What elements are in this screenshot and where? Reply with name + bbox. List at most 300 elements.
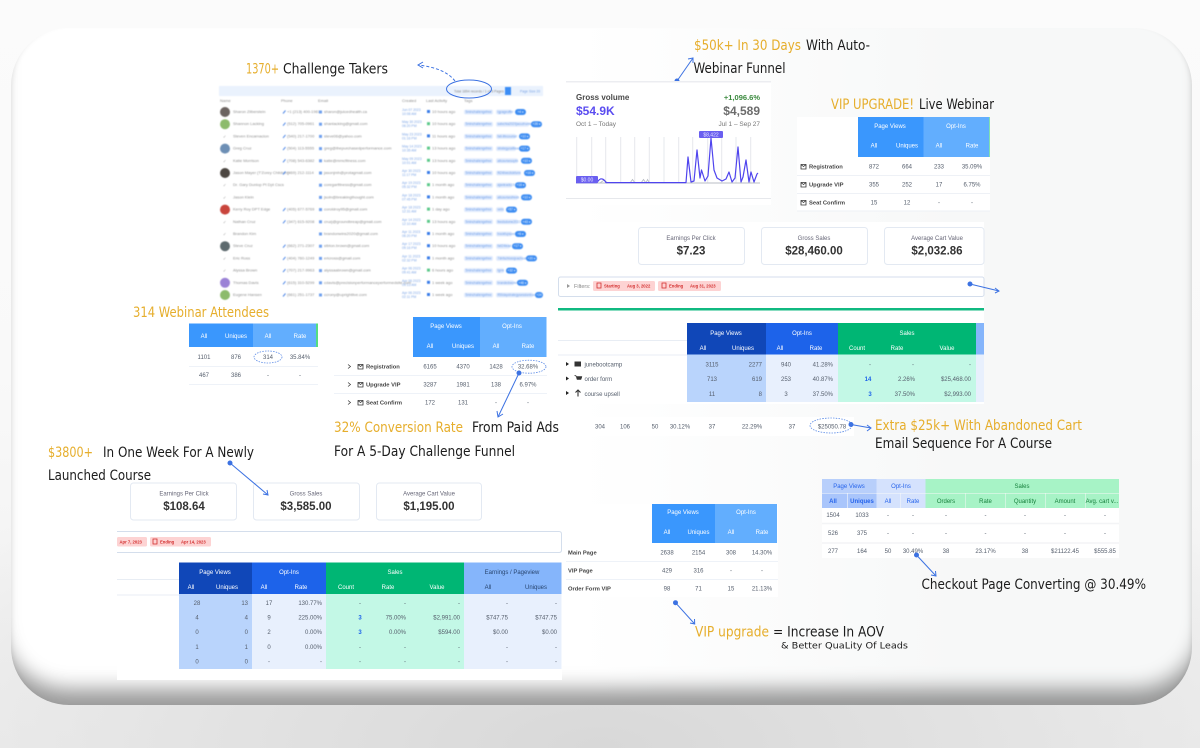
panel: challenge takers contact table: 09:16 PM: [402, 246, 417, 250]
table: new course sales: -: [268, 660, 270, 666]
table: new course sales: $594.00: [438, 630, 461, 636]
panel: challenge takers contact table: 1 month ago: [432, 255, 455, 260]
panel: vip upgrade pages table: Uniques: [687, 530, 710, 536]
panel: vip upgrade pages table: 308: [726, 551, 737, 557]
panel: webinar attendees table: All: [201, 334, 207, 340]
heading: vip upgrade increase in aov: [695, 624, 909, 652]
panel: webinar attendees table: 1101: [198, 355, 211, 361]
panel: abandoned cart funnel table: 11: [709, 392, 716, 398]
panel: abandoned cart funnel table: 619: [752, 377, 763, 383]
arrow: to vip upgrade heading: [674, 601, 695, 624]
abandoned cart result row: 304: [595, 424, 606, 430]
panel: challenge takers contact table: 11 hours ago: [432, 133, 456, 138]
table: new course sales: $0.00: [542, 630, 558, 636]
heading: 50k in 30 days: [694, 38, 870, 77]
table: new course sales: 0: [267, 645, 271, 651]
panel: webinar attendees table: 314: [263, 355, 274, 361]
table: new course sales: -: [458, 645, 460, 651]
panel: challenge takers contact table: +24: [536, 293, 542, 297]
panel: abandoned cart funnel table: [558, 323, 984, 402]
panel: checkout sales table: 50: [885, 549, 892, 555]
panel: challenge takers contact table: Greg Cruz: [233, 146, 251, 151]
panel: challenge takers contact table: Sharon Zilberstein: [233, 109, 265, 114]
panel: vip upgrade live webinar table: 17: [936, 183, 943, 189]
panel: challenge takers contact table: (540) 217-1700: [287, 133, 315, 138]
table: new course sales: 0.00%: [389, 630, 407, 636]
table: new course sales: -: [404, 660, 406, 666]
panel: gross volume chart: $8,422: [703, 132, 719, 138]
panel: challenge takers contact table: coregarfitness@gmail.com: [324, 182, 372, 187]
panel: checkout sales table: Avg. cart v...: [1086, 499, 1119, 505]
panel: webinar attendees table: 35.84%: [290, 355, 311, 361]
panel: challenge takers contact table: greg@thepurchasedperformance.com: [324, 146, 392, 151]
panel: challenge takers contact table: 5minchallengefree: [466, 232, 492, 236]
table: new course sales: Value: [430, 585, 445, 591]
panel: challenge takers contact table: Tags: [464, 98, 472, 103]
panel: paid ads challenge funnel table: 131: [458, 401, 469, 407]
panel: vip upgrade live webinar table: 355: [869, 183, 880, 189]
panel: vip upgrade pages table: 71: [695, 587, 702, 593]
table: new course sales: Page Views: [199, 570, 231, 576]
table: new course sales: All: [188, 585, 194, 591]
panel: vip upgrade pages table: -: [730, 569, 732, 575]
table: new course sales: All: [261, 585, 267, 591]
panel: paid ads challenge funnel table: -: [527, 401, 529, 407]
panel: challenge takers contact table: Phone: [281, 98, 293, 103]
panel: gross volume chart: $4,589: [723, 104, 760, 118]
table: new course sales: -: [555, 601, 557, 607]
panel: challenge takers contact table: ericross@gmail.com: [324, 255, 361, 260]
panel: vip upgrade live webinar table: 664: [902, 165, 913, 171]
panel: challenge takers contact table: shanlacking@gmail.com: [324, 121, 368, 126]
heading: 50k in 30 days: $50k+ In 30 Days: [694, 38, 801, 54]
panel: challenge takers contact table: 13 hours ago: [432, 158, 456, 163]
panel: abandoned cart funnel table: 40.87%: [813, 377, 834, 383]
table: new course sales: 75.00%: [386, 616, 407, 622]
panel: gross volume chart: Jul 1 – Sep 27: [718, 121, 760, 128]
table: new course sales: 3: [358, 630, 362, 636]
panel: checkout sales table: Quantity: [1014, 499, 1036, 505]
panel: checkout sales table: Rate: [979, 499, 992, 505]
panel: challenge takers contact table: +26 ▾: [533, 122, 541, 126]
panel: challenge takers contact table: 07:45 PM: [402, 197, 417, 201]
panel: checkout sales table: -: [1024, 513, 1026, 519]
table: new course sales: 0: [195, 630, 199, 636]
panel: checkout sales table: 1033: [855, 513, 869, 519]
panel: challenge takers contact table: [219, 84, 543, 302]
panel: vip upgrade live webinar table: Uniques: [896, 144, 918, 150]
panel: challenge takers contact table: ✓: [223, 158, 226, 163]
panel: abandoned cart funnel table: 253: [781, 377, 792, 383]
heading: 1370+ challenge takers: 1370+: [246, 62, 279, 78]
arrow: to gross sales card: [228, 461, 268, 495]
panel: challenge takers contact table: (512) 705-0961: [287, 121, 315, 126]
filter bar: aug dates: Starting: [604, 284, 620, 288]
panel: vip upgrade live webinar table: Seat Confirm: [809, 201, 845, 207]
panel: challenge takers contact table: cdavis@precisionperformanceperformedsite.com: [324, 280, 412, 285]
panel: checkout sales table: Rate: [907, 499, 920, 505]
heading: vip upgrade live webinar: [831, 97, 994, 113]
panel: paid ads challenge funnel table: Opt-Ins: [502, 324, 522, 330]
heading: vip upgrade increase in aov: & Better QuaLity Of Leads: [781, 642, 909, 652]
heading: checkout page converting: Checkout Page Converting @ 30.49%: [922, 577, 1146, 593]
panel: challenge takers contact table: +1 (213) 400-1967: [287, 109, 321, 114]
panel: challenge takers contact table: 10:08 AM: [402, 112, 417, 116]
panel: paid ads challenge funnel table: Uniques: [452, 344, 474, 350]
table: new course sales: Sales: [387, 570, 403, 576]
heading: 50k in 30 days: Webinar Funnel: [694, 61, 786, 77]
table: new course sales: 13: [241, 601, 249, 607]
panel: challenge takers contact table: Apr 06 2023: [402, 279, 421, 283]
panel: gross volume chart: [566, 81, 771, 205]
table: new course sales: 0: [245, 630, 249, 636]
panel: checkout sales table: 526: [828, 531, 839, 537]
panel: vip upgrade pages table: 2154: [692, 551, 706, 557]
panel: challenge takers contact table: (615) 310-5299: [287, 280, 315, 285]
table: new course sales: Uniques: [525, 585, 547, 591]
stat cards: earnings, gross sales, cart value: [638, 228, 984, 264]
panel: abandoned cart funnel table: 41.28%: [813, 362, 834, 368]
panel: challenge takers contact table: Shannon Lacking: [233, 121, 264, 126]
panel: challenge takers contact table: Apr 18 2023: [402, 193, 421, 197]
stat cards: new course: $1,195.00: [403, 501, 455, 513]
abandoned cart result row: [581, 417, 854, 436]
annotation: ellipse around 314: [254, 351, 282, 363]
panel: vip upgrade live webinar table: Rate: [966, 144, 979, 150]
table: new course sales: -: [506, 601, 508, 607]
panel: challenge takers contact table: fall24lead: [498, 244, 511, 248]
arrow: dashed to challenge takers heading: [418, 62, 455, 81]
panel: vip upgrade live webinar table: [797, 117, 990, 211]
panel: challenge takers contact table: jasonjmh@protagmail.com: [323, 170, 372, 175]
table: new course sales: -: [359, 660, 361, 666]
panel: challenge takers contact table: Apr 17 2023: [402, 242, 421, 246]
table: new course sales: [117, 562, 562, 669]
panel: paid ads challenge funnel table: 172: [425, 401, 436, 407]
panel: challenge takers contact table: 5minchallengefree: [466, 171, 492, 175]
panel: vip upgrade pages table: 429: [662, 569, 673, 575]
panel: webinar attendees table: Uniques: [225, 334, 247, 340]
arrow: filter bar off right: [968, 282, 999, 293]
panel: checkout sales table: -: [945, 531, 947, 537]
panel: checkout sales table: -: [887, 531, 889, 537]
panel: challenge takers contact table: Nathan Cruz: [233, 219, 255, 224]
panel: webinar attendees table: [189, 324, 318, 384]
panel: challenge takers contact table: allcoursesfreeb: [498, 195, 519, 199]
table: new course sales: 4: [195, 616, 199, 622]
panel: abandoned cart funnel table: 2.26%: [898, 377, 916, 383]
panel: paid ads challenge funnel table: 32.68%: [518, 365, 539, 371]
panel: challenge takers contact table: 5minchallengefree: [466, 159, 492, 163]
panel: challenge takers contact table: 05:32 PM: [402, 185, 417, 189]
panel: challenge takers contact table: +57 ▾: [508, 208, 516, 212]
table: new course sales: -: [359, 645, 361, 651]
table: new course sales: -: [555, 645, 557, 651]
panel: gross volume chart: Oct 1 – Today: [576, 121, 617, 128]
panel: vip upgrade pages table: Rate: [756, 530, 769, 536]
panel: challenge takers contact table: 06:20 PM: [402, 234, 417, 238]
panel: new course funnel backdrop: [117, 526, 562, 680]
panel: challenge takers contact table: 10:35 AM: [402, 149, 417, 153]
panel: abandoned cart funnel table: 3: [784, 392, 788, 398]
panel: abandoned cart funnel table: course upsell: [584, 392, 620, 398]
panel: vip upgrade pages table: Main Page: [568, 551, 597, 557]
stat cards: new course: $108.64: [163, 501, 205, 513]
panel: challenge takers contact table: tgrm: [498, 269, 504, 273]
stat cards: new course: Gross Sales: [290, 492, 322, 498]
panel: challenge takers contact table: Apr 19 2023: [402, 181, 421, 185]
panel: abandoned cart funnel table: -: [969, 362, 971, 368]
panel: challenge takers contact table: (662) 271-2307: [287, 243, 315, 248]
panel: checkout sales table: 23.17%: [975, 549, 996, 555]
table: new course sales: -: [506, 660, 508, 666]
panel: challenge takers contact table: 01:16 PM: [402, 136, 417, 140]
panel: challenge takers contact table: Eugene Hansen: [233, 292, 262, 297]
table: new course sales: $0.00: [493, 630, 509, 636]
panel: checkout sales table: -: [1104, 531, 1106, 537]
panel: checkout sales table: 1504: [826, 513, 840, 519]
panel: challenge takers contact table: ccrony@uprightlive.com: [324, 292, 367, 297]
panel: challenge takers contact table: ✓: [223, 195, 226, 200]
panel: challenge takers contact table: Kerry Roy DPT Edge: [233, 207, 271, 212]
panel: challenge takers contact table: May 09 2023: [402, 157, 422, 161]
stat cards: earnings, gross sales, cart value: Average Cart Value: [911, 236, 964, 242]
heading: extra 25k abandoned cart: [875, 418, 1082, 452]
panel: challenge takers contact table: allcoursesoptn: [498, 159, 518, 163]
panel: challenge takers contact table: sharon@juicedhealth.ca: [324, 109, 368, 114]
panel: challenge takers contact table: 10 hours ago: [432, 243, 456, 248]
panel: challenge takers contact table: 02:32 PM: [402, 258, 417, 262]
panel: vip upgrade live webinar table: All: [871, 144, 877, 150]
heading: 32% conversion rate: From Paid Ads: [472, 420, 559, 436]
panel: challenge takers contact table: ajaxleads19: [498, 183, 515, 187]
panel: vip upgrade pages table: 21.13%: [752, 587, 773, 593]
panel: challenge takers contact table: 1 month ago: [432, 231, 455, 236]
panel: challenge takers contact table: Eric Ross: [233, 255, 250, 260]
panel: challenge takers contact table: +16 ▾: [526, 171, 534, 175]
table: new course sales: $747.75: [535, 616, 558, 622]
table: new course sales: Rate: [295, 585, 308, 591]
panel: abandoned cart funnel table: 3: [868, 392, 872, 398]
panel: abandoned cart funnel table: Sales: [899, 331, 915, 337]
arrow: to checkout heading: [914, 553, 936, 576]
panel: gross volume chart: Gross volume: [576, 93, 630, 102]
panel: challenge takers contact table: jsoln@breakingthought.com: [323, 194, 374, 199]
panel: challenge takers contact table: +10 ▾: [523, 195, 531, 199]
panel: challenge takers contact table: ✓: [223, 268, 226, 273]
panel: vip upgrade pages table: Order Form VIP: [568, 587, 611, 593]
panel: challenge takers contact table: 5minchallengefree: [466, 147, 492, 151]
panel: vip upgrade pages table: 98: [664, 587, 671, 593]
filter bar: april dates: Ending: [160, 539, 175, 544]
panel: challenge takers contact table: ✓: [223, 134, 226, 139]
panel: challenge takers contact table: Created: [402, 98, 416, 103]
panel: vip upgrade live webinar table: Page Views: [874, 124, 906, 130]
panel: checkout sales table: -: [945, 513, 947, 519]
panel: challenge takers contact table: ✓: [223, 183, 226, 188]
panel: challenge takers contact table: (504) 113-5555: [287, 146, 315, 151]
panel: challenge takers contact table: +4 ▾: [517, 110, 524, 114]
panel: challenge takers contact table: Total 1894 records / 1 of 5 Pages: [454, 90, 504, 94]
panel: challenge takers contact table: 13 hours ago: [432, 146, 456, 151]
panel: challenge takers contact table: (405) 677-5769: [287, 207, 315, 212]
panel: paid ads challenge funnel table: All: [427, 344, 433, 350]
panel: abandoned cart funnel table: Opt-Ins: [792, 331, 812, 337]
stat cards: earnings, gross sales, cart value: $28,460.00: [785, 246, 843, 258]
panel: abandoned cart funnel table: 8: [759, 392, 763, 398]
panel: challenge takers contact table: +43 ▾: [523, 220, 531, 224]
panel: challenge takers contact table: 02:11 PM: [402, 295, 416, 299]
stat cards: new course: Average Cart Value: [403, 492, 456, 498]
table: new course sales: 0: [195, 660, 199, 666]
panel: challenge takers contact table: May 23 2023: [402, 132, 422, 136]
panel: checkout sales table: $555.85: [1094, 549, 1116, 555]
table: new course sales: Count: [338, 585, 354, 591]
panel: challenge takers contact table: (707) 217-9963: [287, 268, 315, 273]
panel: checkout sales table: All: [885, 499, 891, 505]
table: new course sales: 0: [245, 660, 249, 666]
panel: vip upgrade live webinar table: -: [938, 201, 940, 207]
panel: webinar attendees table: 467: [199, 373, 210, 379]
panel: challenge takers contact table: brandonwins2020@gmail.com: [324, 231, 379, 236]
panel: challenge takers contact table: Steven Encarnacion: [233, 133, 269, 138]
table: new course sales: 4: [245, 616, 249, 622]
panel: challenge takers contact table: steve06@yahoo.com: [324, 133, 362, 138]
heading: vip upgrade live webinar: Live Webinar: [919, 97, 994, 113]
panel: challenge takers contact table: May 30 2023: [402, 120, 422, 124]
panel: challenge takers contact table: 10:01 AM: [402, 161, 417, 165]
panel: challenge takers contact table: strategycalllead: [498, 147, 520, 151]
abandoned cart result row: 37: [789, 424, 796, 430]
panel: webinar attendees table: 386: [231, 373, 242, 379]
panel: challenge takers contact table: (469) 212-1114: [287, 170, 315, 175]
panel: vip upgrade live webinar table: 872: [869, 165, 880, 171]
panel: checkout sales table: [822, 479, 1119, 558]
panel: checkout sales table: Uniques: [850, 499, 874, 505]
panel: challenge takers contact table: stbton.brown@gmail.com: [324, 243, 370, 248]
green divider bar: [558, 308, 984, 310]
panel: challenge takers contact table: 12:10 AM: [402, 222, 417, 226]
panel: challenge takers contact table: (404) 760-1249: [287, 255, 315, 260]
panel: challenge takers contact table: 10 hours ago: [432, 121, 456, 126]
panel: vip upgrade live webinar table: Opt-Ins: [946, 124, 966, 130]
panel: checkout sales table: Sales: [1014, 484, 1030, 490]
panel: checkout sales table: -: [1024, 531, 1026, 537]
panel: challenge takers contact table: 5minchallengefree: [466, 134, 492, 138]
panel: challenge takers contact table: 1 month ago: [432, 182, 455, 187]
heading: 3800 in one week: [48, 445, 254, 484]
table: new course sales: $747.75: [486, 616, 509, 622]
panel: abandoned cart funnel table: $25,468.00: [941, 377, 972, 383]
stat cards: earnings, gross sales, cart value: $7.23: [677, 246, 705, 258]
heading: 1370+ challenge takers: [246, 62, 388, 78]
panel: challenge takers contact table: 11:17 PM: [402, 173, 416, 177]
panel: challenge takers contact table: 06:20 PM: [402, 124, 417, 128]
panel: challenge takers contact table: 5minchallengefree: [466, 220, 492, 224]
panel: challenge takers contact table: ✓: [223, 256, 226, 261]
panel: abandoned cart funnel table: 940: [781, 362, 792, 368]
panel: challenge takers contact table: 5minchallengefree: [466, 281, 492, 285]
table: new course sales: 130.77%: [298, 601, 323, 607]
abandoned cart result row: 22.29%: [742, 424, 763, 430]
panel: challenge takers contact table: cruzj@groundbreap@gmail.com: [324, 219, 382, 224]
panel: vip upgrade live webinar table: 15: [871, 201, 878, 207]
table: new course sales: 0.00%: [305, 630, 323, 636]
table: new course sales: 1: [195, 645, 199, 651]
panel: challenge takers contact table: 5minchallengefree: [466, 122, 492, 126]
table: new course sales: 28: [194, 601, 201, 607]
panel: challenge takers contact table: +20 ▾: [528, 256, 536, 260]
panel: challenge takers contact table: 5minchallengefree: [466, 244, 492, 248]
panel: vip upgrade live webinar table: -: [971, 201, 973, 207]
panel: challenge takers contact table: Apr 14 2023: [402, 218, 421, 222]
panel: checkout sales table: -: [1104, 513, 1106, 519]
panel: checkout sales table: 277: [828, 549, 839, 555]
filter bar: aug dates: [558, 277, 984, 296]
panel: abandoned cart funnel table: -: [912, 362, 914, 368]
panel: vip upgrade pages table: 14.30%: [752, 551, 773, 557]
panel: vip upgrade pages table: 15: [728, 587, 735, 593]
panel: challenge takers contact table: fl50daystrategysessionbooked: [498, 293, 541, 297]
panel: checkout sales table: -: [984, 531, 986, 537]
panel: challenge takers contact table: 5minchallengefree: [466, 256, 492, 260]
panel: abandoned cart funnel table: order form: [584, 377, 612, 383]
table: new course sales: 17: [266, 601, 273, 607]
panel: paid ads challenge funnel table: Page Views: [430, 324, 462, 330]
filter bar: aug dates: Aug 31, 2023: [690, 284, 716, 288]
panel: challenge takers contact table: Apr 06 2023: [402, 291, 421, 295]
table: new course sales: -: [320, 660, 322, 666]
panel: paid ads challenge funnel table: Seat Confirm: [366, 401, 402, 407]
arrow: to conversion rate heading: [497, 371, 521, 417]
panel: abandoned cart funnel table: 2277: [749, 362, 763, 368]
panel: paid ads challenge funnel table: 138: [491, 383, 502, 389]
table: new course sales: -: [506, 645, 508, 651]
panel: challenge takers contact table: 09:13 AM: [402, 283, 417, 287]
panel: challenge takers contact table: Jason Klein: [233, 194, 254, 199]
table: new course sales: $2,991.00: [433, 616, 461, 622]
panel: challenge takers contact table: ✓: [223, 232, 226, 236]
panel: paid ads challenge funnel table: 3287: [423, 383, 437, 389]
panel: challenge takers contact table: 10 hours ago: [432, 170, 456, 175]
panel: abandoned cart funnel table: All: [700, 346, 706, 352]
heading: 3800 in one week: Launched Course: [48, 468, 151, 484]
table: new course sales: 9: [267, 616, 271, 622]
panel: gross volume chart: +1,096.6%: [724, 93, 760, 102]
panel: challenge takers contact table: 5minchallengefree: [466, 269, 492, 273]
panel: challenge takers contact table: 1 day ago: [432, 207, 450, 212]
panel: paid ads challenge funnel table: Registration: [366, 365, 400, 371]
table: new course sales: 225.00%: [298, 616, 323, 622]
panel: challenge takers contact table: Alyssa Brown: [233, 268, 257, 273]
heading: extra 25k abandoned cart: Email Sequence For A Course: [875, 436, 1052, 452]
panel: challenge takers contact table: fit24liveclickfunn: [498, 171, 521, 175]
panel: paid ads challenge funnel table: 4370: [456, 365, 470, 371]
panel: challenge takers contact table: (347) 615-9208: [287, 219, 315, 224]
panel: challenge takers contact table: 1 month ago: [432, 194, 455, 199]
panel: challenge takers contact table: alyssaabrown@gmail.com: [324, 268, 371, 273]
panel: vip upgrade live webinar table: Registration: [809, 165, 843, 171]
panel: vip upgrade pages table: 2638: [660, 551, 674, 557]
panel: webinar attendees table: -: [299, 373, 301, 379]
panel: abandoned cart funnel table: 14: [865, 377, 872, 383]
heading: 3800 in one week: In One Week For A Newly: [103, 445, 254, 461]
panel: challenge takers contact table: 5minchallengefree: [466, 208, 492, 212]
stat cards: new course: [130, 483, 482, 520]
panel: challenge takers contact table: 5minchallengefree: [466, 183, 492, 187]
panel: paid ads challenge funnel table: 6165: [423, 365, 437, 371]
panel: challenge takers contact table: Apr 30 2023: [402, 169, 421, 173]
